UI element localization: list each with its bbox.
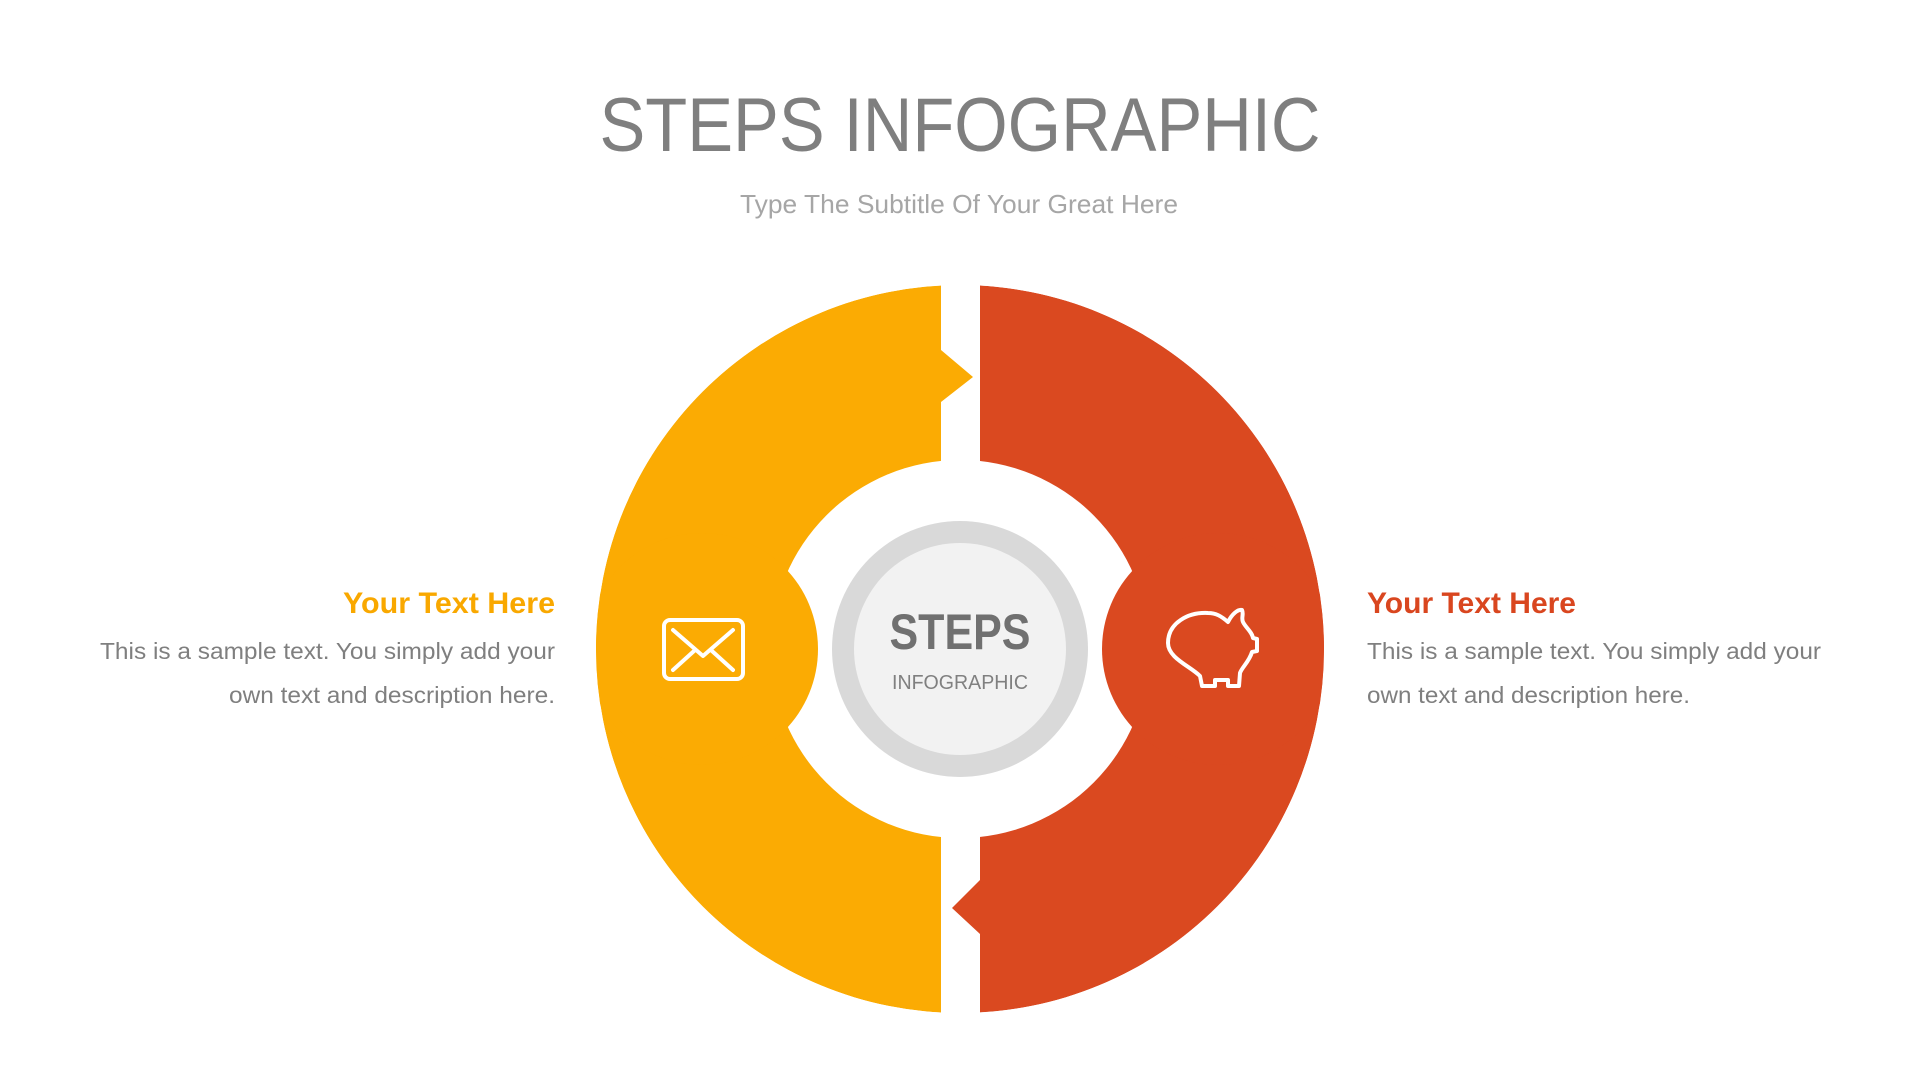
text block: right <box>1367 587 1821 708</box>
panel: orange half ring <box>952 286 1324 1012</box>
center badge: INFOGRAPHIC <box>892 672 1028 694</box>
text block: right: Your Text Here <box>1367 587 1576 620</box>
center badge: STEPS <box>890 604 1030 660</box>
panel: yellow half ring <box>596 286 973 1012</box>
subtitle: Type The Subtitle Of Your Great Here <box>740 189 1178 219</box>
text block: left: Your Text Here <box>343 587 555 620</box>
icon: piggy bank <box>1168 610 1257 686</box>
text block: right: This is a sample text. You simply add your <box>1367 638 1821 664</box>
center badge <box>832 521 1088 777</box>
title: STEPS INFOGRAPHIC <box>600 83 1320 168</box>
text block: left <box>100 587 555 708</box>
text block: right: own text and description here. <box>1367 682 1690 708</box>
text block: left: own text and description here. <box>229 682 555 708</box>
text block: left: This is a sample text. You simply add your <box>100 638 555 664</box>
icon: envelope <box>664 620 743 679</box>
